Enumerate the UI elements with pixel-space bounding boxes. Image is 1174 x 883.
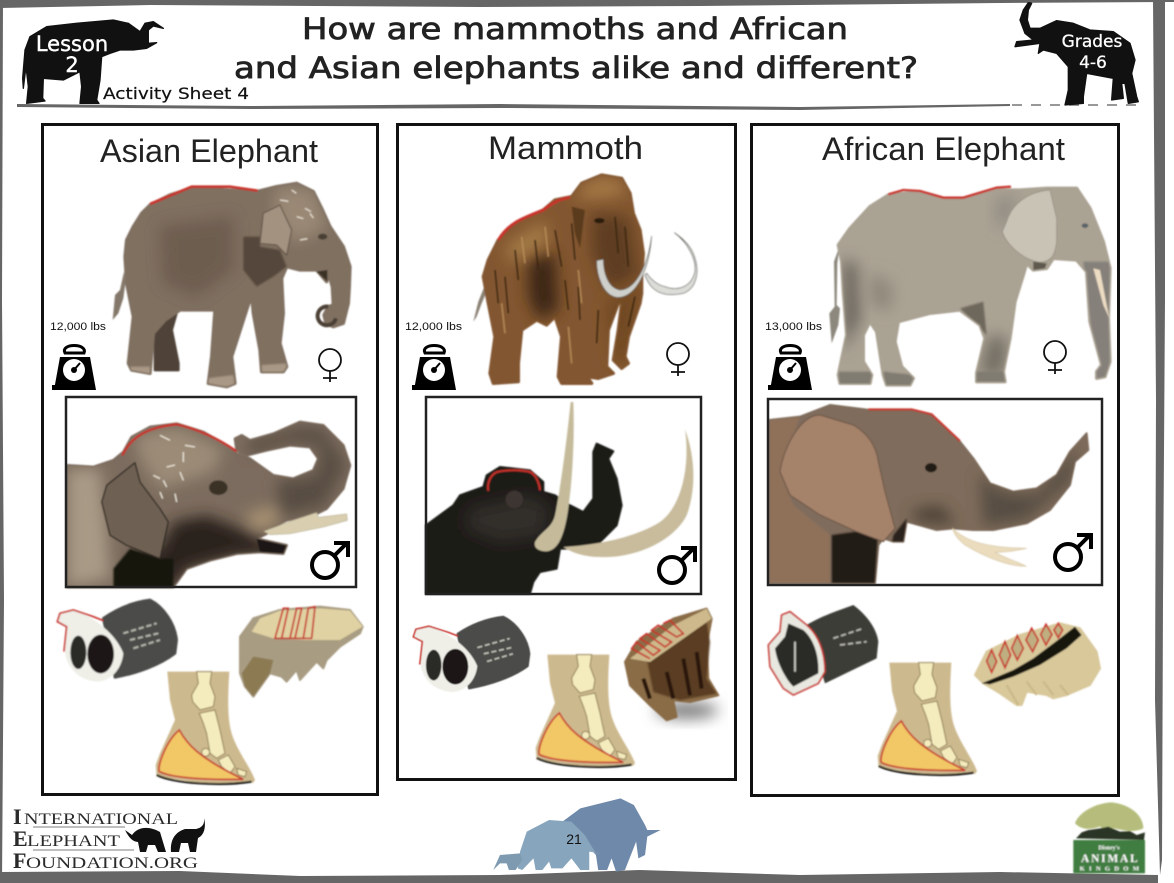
- image: tusk cross-section: [57, 600, 177, 682]
- image: foot diagram: [536, 655, 635, 767]
- heading: African Elephant: [822, 131, 1065, 167]
- grades label: 4-6: [1079, 53, 1107, 73]
- logo wordmark: LEPHANT: [27, 833, 120, 850]
- red back line: [150, 187, 258, 204]
- logo wordmark: I: [13, 804, 22, 829]
- logo text: ANIMAL: [1081, 853, 1138, 865]
- title: and Asian elephants alike and different?: [234, 51, 918, 85]
- logo: Disney's Animal Kingdom: [1073, 802, 1145, 873]
- heading: Asian Elephant: [100, 133, 318, 169]
- logo wordmark: [13, 804, 199, 873]
- image: tusk cross-section: [768, 605, 878, 695]
- image: molar tooth: [625, 609, 718, 720]
- image: tusk cross-section: [413, 617, 529, 692]
- panel frame: [752, 124, 1118, 796]
- animal silhouettes: [1076, 827, 1145, 840]
- image: foot diagram: [878, 663, 977, 775]
- logo wordmark: OUNDATION.ORG: [26, 855, 199, 872]
- red back line: [888, 187, 1011, 198]
- icon: male symbol: [1055, 535, 1091, 570]
- weight label: 12,000 lbs: [50, 321, 107, 333]
- icon: male symbol: [659, 548, 695, 583]
- panel frame: [42, 124, 378, 794]
- grades label: Grades: [1062, 32, 1122, 52]
- panel frame: [398, 124, 736, 780]
- image: molar tooth: [240, 607, 363, 697]
- weight label: 12,000 lbs: [405, 321, 463, 333]
- lesson label: Lesson: [36, 32, 108, 56]
- page number: 21: [566, 831, 582, 847]
- image: foot diagram: [156, 672, 255, 784]
- header: grades elephant: [1015, 3, 1138, 105]
- icon: female symbol: [1044, 341, 1066, 374]
- red head line: [488, 470, 540, 491]
- image box: male Asian elephant head: [66, 397, 356, 589]
- logo wordmark: NTERNATIONAL: [24, 811, 178, 828]
- panel: Asian elephant: [42, 124, 378, 794]
- icon: scale: [52, 346, 96, 390]
- logo text: KINGDOM: [1080, 866, 1140, 873]
- red head line: [122, 424, 237, 455]
- image: female mammoth: [473, 175, 697, 383]
- logo rules: [33, 827, 134, 850]
- icon: female symbol: [319, 349, 341, 382]
- logo wordmark: E: [13, 826, 28, 851]
- red head line: [868, 409, 960, 441]
- image: female Asian elephant: [113, 183, 350, 387]
- lesson label: 2: [65, 53, 79, 77]
- title: How are mammoths and African: [302, 12, 848, 46]
- icon: male symbol: [312, 543, 348, 578]
- logo text: Disney's: [1098, 845, 1120, 851]
- green sign: [1073, 840, 1145, 873]
- panel: Mammoth: [398, 124, 736, 780]
- logo: International Elephant Foundation: [13, 804, 205, 873]
- image: female African elephant: [829, 187, 1110, 387]
- image box: male African elephant head: [768, 399, 1102, 585]
- heading: Mammoth: [488, 130, 643, 166]
- baby blue elephant: [493, 853, 522, 870]
- tree canopy: [1075, 802, 1143, 832]
- weight label: 13,000 lbs: [765, 321, 823, 333]
- red back line: [498, 197, 570, 240]
- header: lesson elephant: [23, 20, 249, 103]
- icon: scale: [768, 346, 812, 390]
- medium blue elephant: [518, 820, 600, 870]
- icon: lesson elephant silhouette: [23, 20, 163, 103]
- icon: scale: [412, 346, 456, 390]
- icon: female symbol: [667, 343, 689, 376]
- image: molar tooth: [975, 623, 1100, 705]
- logo wordmark: F: [13, 848, 26, 873]
- image box: male mammoth head: [426, 397, 701, 594]
- icon: grades elephant silhouette: [1015, 3, 1138, 105]
- activity sheet label: Activity Sheet 4: [103, 84, 249, 103]
- footer elephants with page number: [493, 798, 661, 872]
- panel: African elephant: [752, 124, 1118, 796]
- logo elephants: [125, 818, 205, 852]
- large blue elephant: [562, 798, 661, 872]
